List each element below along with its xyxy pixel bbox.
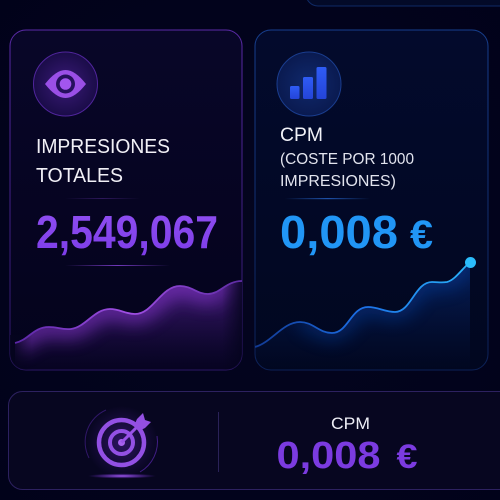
icon: eye: [34, 52, 98, 116]
icon: target: [85, 406, 158, 478]
heading: cpm coste: (COSTE POR 1000: [280, 151, 414, 168]
heading: cpm coste: CPM: [280, 125, 323, 146]
line chart: cpm: [255, 257, 476, 352]
icon: bars: [277, 52, 341, 116]
panel: bottom cpm: [8, 392, 500, 490]
end point: [465, 257, 476, 268]
panel: impresiones totales: [10, 30, 242, 370]
value: bottom cpm: 0,008: [276, 435, 380, 477]
heading: cpm coste: IMPRESIONES): [280, 173, 396, 190]
value: impresiones: 2,549,067: [36, 206, 218, 258]
partial top panel: [306, 0, 500, 6]
value: cpm: 0,008: [280, 206, 398, 258]
heading: impresiones totales: [36, 136, 170, 187]
panel: cpm coste: [255, 30, 488, 370]
label: cpm: CPM: [331, 415, 370, 433]
heading: impresiones totales: TOTALES: [36, 165, 123, 187]
value: cpm: €: [410, 213, 433, 257]
value: bottom cpm: €: [396, 438, 418, 476]
heading: impresiones totales: IMPRESIONES: [36, 136, 170, 158]
heading: cpm coste: [280, 125, 414, 190]
area chart: impresiones: [10, 281, 242, 370]
value: bottom cpm: [276, 435, 418, 477]
